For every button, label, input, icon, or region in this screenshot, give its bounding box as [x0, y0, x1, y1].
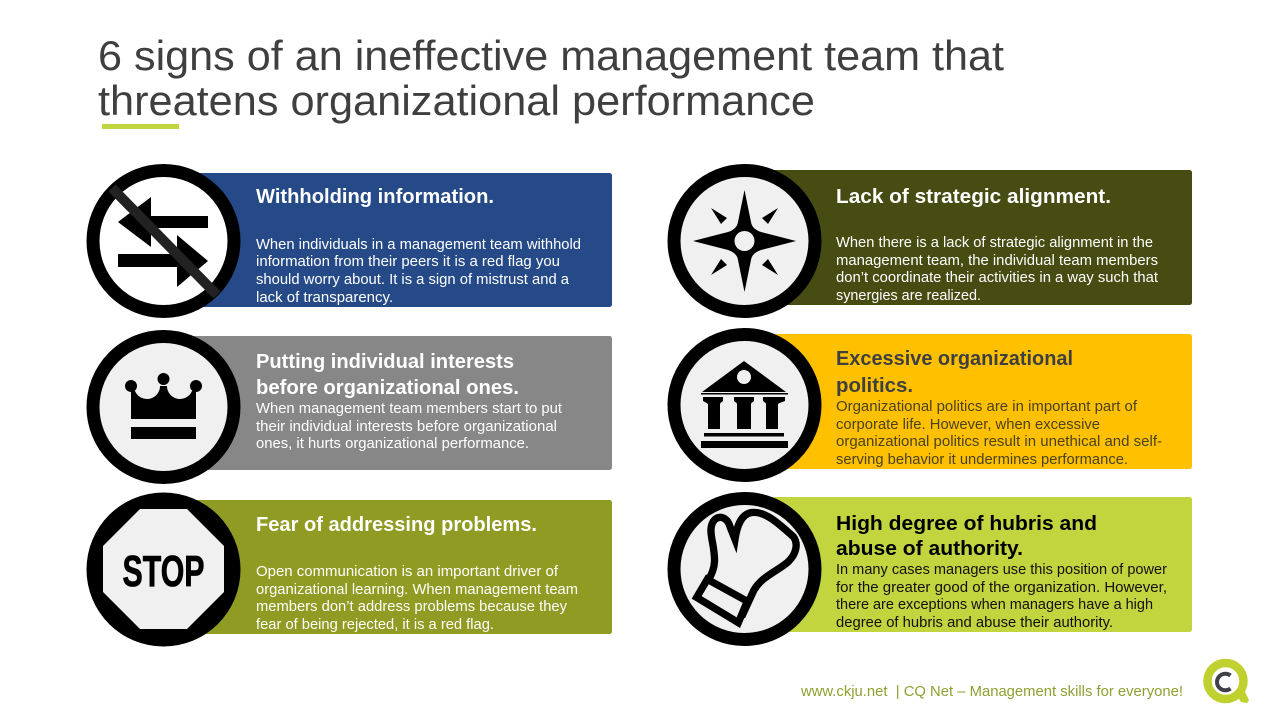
icon: boxing glove — [674, 498, 815, 640]
body text: should worry about. It is a sign of mistrust and a — [256, 272, 570, 288]
body text — [256, 564, 578, 633]
panel: individual interests — [93, 336, 612, 478]
body text — [836, 562, 1167, 631]
bar — [750, 497, 1192, 632]
panel: withholding information — [93, 170, 612, 312]
body text: In many cases managers use this position of power — [836, 562, 1167, 578]
heading: politics. — [836, 374, 913, 397]
icon: compass star — [674, 170, 815, 312]
heading: Withholding information. — [256, 185, 494, 208]
heading — [836, 347, 1073, 397]
icon: CQ logo — [1208, 663, 1249, 703]
panel: hubris and abuse of authority — [674, 497, 1192, 640]
body text — [836, 399, 1162, 468]
body text: lack of transparency. — [256, 290, 393, 306]
body text: ones, it hurts organizational performance. — [256, 436, 529, 452]
panel: lack of strategic alignment — [674, 170, 1192, 312]
body text: degree of hubris and abuse their authority. — [836, 615, 1113, 631]
icon: classical building — [674, 334, 815, 476]
body text: When there is a lack of strategic alignment in the — [836, 235, 1153, 251]
footer text: www.ckju.net | CQ Net – Management skills for everyone! — [800, 684, 1183, 700]
body text: there are exceptions when managers have a high — [836, 597, 1153, 613]
body text: organizational learning. When management team — [256, 582, 578, 598]
bar — [750, 170, 1192, 305]
heading: before organizational ones. — [256, 376, 519, 399]
body text: organizational politics result in unethical and self- — [836, 434, 1162, 450]
body text: management team, the individual team members — [836, 253, 1158, 269]
heading: Excessive organizational — [836, 347, 1073, 370]
bar — [170, 336, 612, 470]
title — [98, 32, 1004, 124]
body text: synergies are realized. — [836, 288, 981, 304]
bar — [170, 500, 612, 634]
title: threatens organizational performance — [98, 77, 815, 124]
heading: Fear of addressing problems. — [256, 513, 537, 536]
body text: corporate life. However, when excessive — [836, 417, 1100, 433]
body text — [256, 237, 581, 306]
icon: stop sign: STOP — [122, 547, 204, 596]
heading — [836, 512, 1097, 560]
title: 6 signs of an ineffective management team that — [98, 32, 1004, 79]
body text: don’t coordinate their activities in a way such that — [836, 270, 1158, 286]
body text: fear of being rejected, it is a red flag. — [256, 617, 494, 633]
heading: abuse of authority. — [836, 537, 1023, 560]
body text: members don’t address problems because they — [256, 599, 568, 615]
body text: serving behavior it undermines performance. — [836, 452, 1128, 468]
body text — [256, 401, 562, 452]
icon: stop sign — [86, 492, 240, 646]
body text — [836, 235, 1158, 304]
bar — [170, 173, 612, 307]
body text: When management team members start to put — [256, 401, 562, 417]
body text: When individuals in a management team withhold — [256, 237, 581, 253]
heading: Putting individual interests — [256, 350, 514, 373]
icon: crown — [93, 336, 234, 478]
body text: for the greater good of the organization. However, — [836, 580, 1167, 596]
heading — [256, 350, 519, 399]
heading: Lack of strategic alignment. — [836, 185, 1111, 208]
heading: High degree of hubris and — [836, 512, 1097, 535]
panel: excessive organizational politics — [674, 334, 1192, 476]
panel: fear of addressing problems — [86, 492, 612, 646]
icon: crossed-out opposing arrows — [93, 170, 234, 312]
body text: information from their peers it is a red flag you — [256, 254, 560, 270]
body text: Open communication is an important driver of — [256, 564, 559, 580]
bar — [750, 334, 1192, 469]
title accent underline — [102, 124, 179, 129]
body text: their individual interests before organizational — [256, 419, 557, 435]
body text: Organizational politics are in important part of — [836, 399, 1138, 415]
